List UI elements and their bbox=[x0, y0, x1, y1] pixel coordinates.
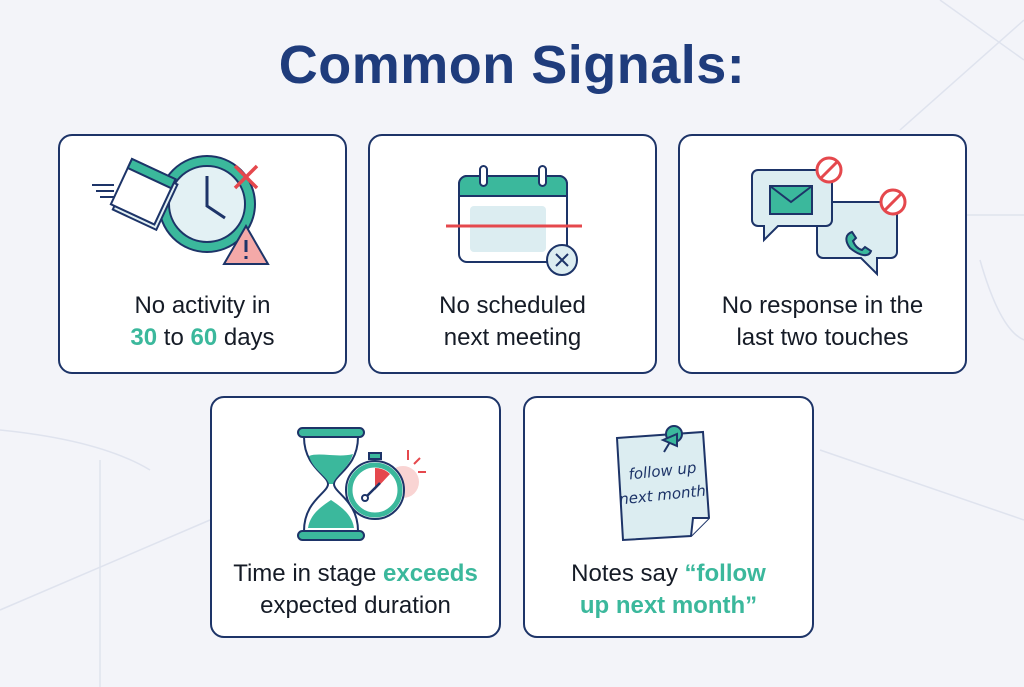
text bbox=[233, 560, 478, 619]
text bbox=[439, 292, 586, 351]
text: No scheduled bbox=[439, 292, 586, 319]
panel: notes say bbox=[523, 396, 814, 638]
text: up next month” bbox=[580, 592, 757, 619]
panel: time in stage bbox=[210, 396, 501, 638]
panel: no scheduled meeting bbox=[368, 134, 657, 374]
icon: sticky note: follow up bbox=[628, 459, 697, 484]
title: Common Signals: bbox=[279, 35, 745, 95]
icon: sticky note: next month bbox=[618, 482, 707, 509]
text bbox=[130, 292, 275, 351]
panel: no activity bbox=[58, 134, 347, 374]
text: next meeting bbox=[444, 324, 581, 351]
text: Time in stage exceeds bbox=[233, 560, 478, 587]
icon: calendar clock warning bbox=[92, 155, 270, 265]
panel: no response bbox=[678, 134, 967, 374]
text bbox=[722, 292, 923, 351]
text: Notes say “follow bbox=[571, 560, 766, 587]
text: 30 to 60 days bbox=[130, 324, 275, 351]
text: No response in the bbox=[722, 292, 923, 319]
text: No activity in bbox=[134, 292, 271, 319]
icon: message and phone blocked bbox=[751, 156, 906, 276]
text bbox=[571, 560, 766, 619]
icon: calendar crossed bbox=[446, 165, 582, 276]
text: expected duration bbox=[260, 592, 451, 619]
icon: hourglass stopwatch bbox=[297, 427, 426, 541]
text: last two touches bbox=[736, 324, 909, 351]
icon: sticky note bbox=[616, 425, 710, 541]
